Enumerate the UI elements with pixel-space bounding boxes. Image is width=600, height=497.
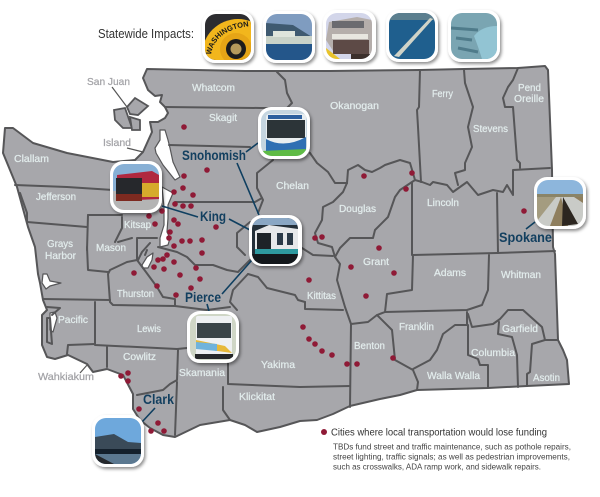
photo: Amtrak Cascades train [323,10,376,62]
county labels: Adams [434,267,466,279]
county labels: Jefferson [36,191,76,203]
county labels: Skamania [179,367,225,379]
county name labels: Snohomish [182,147,246,163]
county labels: Pend [518,82,541,94]
county labels: Franklin [399,321,434,333]
county labels: Whitman [501,269,541,281]
county labels: Oreille [514,93,544,105]
county labels: Okanogan [330,100,379,112]
county labels: Asotin [533,372,560,384]
outside county labels with leaders: Island [103,137,131,149]
leader lines to county photos [142,143,535,422]
map of Washington counties [3,66,569,437]
county labels: Walla Walla [427,370,480,382]
title: Statewide Impacts: Statewide Impacts: [98,27,194,41]
county boundaries [15,68,557,435]
county labels: Douglas [339,203,376,215]
county labels: Stevens [473,123,508,135]
Puget Sound and coastal inlets [42,130,180,332]
county labels: Mason [96,242,126,254]
county labels: Columbia [471,347,515,359]
photo: floating bridge [386,10,438,62]
photo: Spokane highway [534,177,586,229]
outside county labels with leaders: San Juan [87,76,130,88]
outside county labels with leaders [38,76,143,383]
photo: Washington state seal: WASHINGTON [206,21,248,54]
county labels: Garfield [502,323,538,335]
description text [333,442,571,472]
county labels: Kitsap [124,219,151,231]
county labels: Grays [47,238,73,250]
county name labels: Pierce [185,289,221,305]
photo: Snohomish bus [258,107,310,159]
photo: Washington state seal [201,10,258,68]
San Juan islands [114,98,148,130]
county labels: Lewis [137,323,161,335]
state shape [3,66,569,437]
outside county labels with leaders: Wahkiakum [38,371,94,383]
legend: Cities where local transportation would lose funding [331,426,547,438]
county labels: Pacific [58,314,88,326]
county labels: Chelan [276,180,309,192]
county name labels: King [200,208,226,224]
description text: TBDs fund street and traffic maintenance, such as pothole repairs, [333,442,571,452]
county name labels: Spokane [499,229,552,245]
county labels [14,82,560,403]
county labels: Whatcom [192,82,235,94]
photo: Sound Transit light rail [249,215,302,267]
county labels: Thurston [117,288,154,300]
cities losing funding: dots [118,124,527,434]
photo: King County Metro bus [110,161,162,213]
county labels: Benton [354,340,385,352]
county labels: Yakima [261,359,295,371]
county labels: Clallam [14,153,49,165]
photo: aerial coast map [448,10,500,62]
county labels: Klickitat [239,391,275,403]
county labels: Cowlitz [123,351,156,363]
county name labels: Clark [143,391,174,407]
county labels: Kittitas [307,290,336,302]
photo: Clark County bridge [92,415,144,467]
county labels: Skagit [209,112,237,124]
county labels: Grant [363,256,389,268]
county labels: Harbor [45,250,76,262]
description text: such as crosswalks, ADA ramp work, and sidewalk repairs. [333,462,541,472]
county name labels [143,147,552,407]
county labels: Ferry [432,88,454,100]
photo: ferry [263,11,315,63]
description text: street lighting, traffic signals; as well as pedestrian improvements, [333,452,570,462]
county labels: Lincoln [427,197,459,209]
photo: Pierce Transit bus [187,311,239,363]
